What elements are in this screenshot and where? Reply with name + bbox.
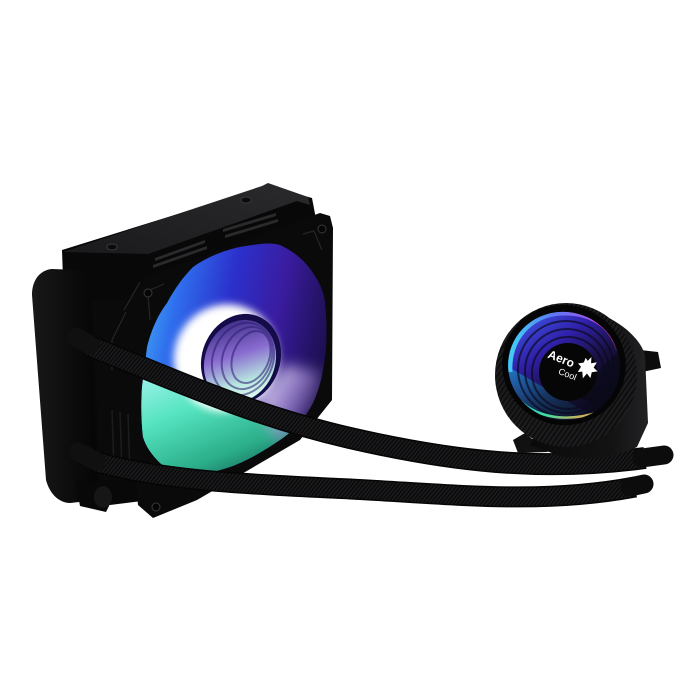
drain plug	[75, 480, 114, 512]
radiator top plate	[63, 183, 310, 254]
infinity mirror hub	[188, 302, 294, 416]
end tank	[32, 269, 98, 503]
pump bezel rim	[489, 291, 639, 439]
logo	[542, 342, 602, 389]
radiator fin block	[92, 300, 140, 480]
liquid cooler product illustration	[32, 183, 674, 518]
logo: Cool	[557, 366, 578, 382]
logo: Aero	[546, 347, 577, 370]
pump right tab	[640, 350, 661, 372]
radiator grille slots	[153, 213, 278, 268]
pump cylinder	[530, 310, 648, 458]
upper braided tube	[90, 346, 645, 464]
fan right fade	[255, 365, 322, 445]
fan lit opening	[141, 244, 326, 471]
radiator inner body	[62, 186, 320, 505]
pump bezel carbon	[495, 303, 637, 447]
lower braided tube	[96, 462, 635, 497]
pump RGB ring	[496, 299, 632, 433]
radiator tube fittings	[76, 337, 96, 461]
fan lower green glow	[141, 380, 289, 471]
fan white mid glow	[168, 298, 285, 418]
panel: pump	[495, 303, 661, 458]
radiator screws	[107, 197, 251, 250]
pump fittings	[630, 455, 664, 487]
panel: radiator	[32, 183, 320, 512]
fan screws	[144, 225, 326, 511]
pump mounting tab	[513, 433, 548, 453]
pump centre cap	[539, 343, 597, 401]
pump infinity mirror	[508, 312, 620, 420]
logo leaf icon	[574, 353, 602, 382]
panel: tubes	[76, 337, 664, 497]
fan frame	[122, 213, 333, 518]
fan frame corner details	[112, 231, 322, 370]
panel: fan	[112, 213, 340, 518]
